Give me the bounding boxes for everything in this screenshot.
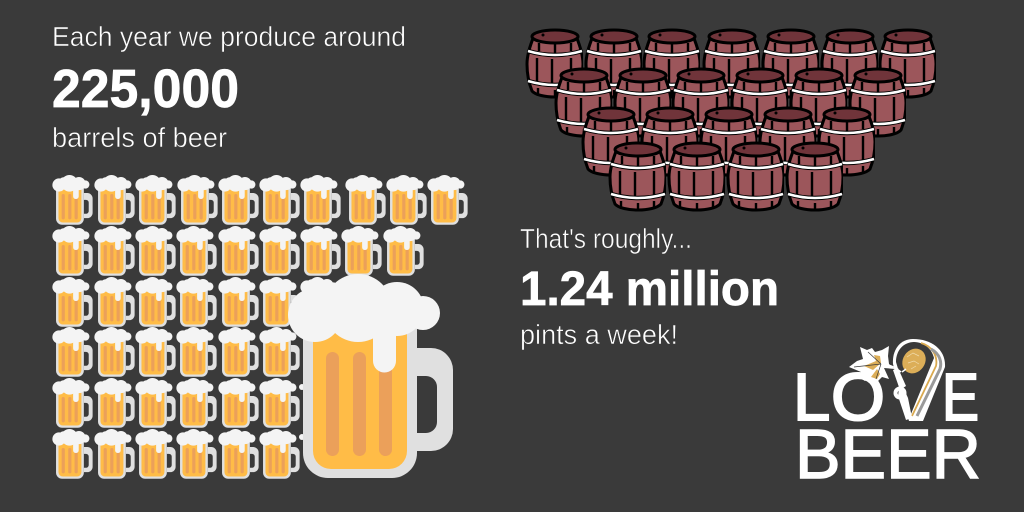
- heading: annual production: 225,000: [52, 59, 239, 119]
- logo: stylised V with hop: [849, 339, 945, 421]
- callout: pints a week: 1.24 million: [520, 263, 779, 316]
- callout: pints a week: pints a week!: [520, 319, 678, 350]
- logo: Love Beer: O: [831, 360, 885, 435]
- logo: Love Beer: [793, 339, 981, 493]
- heading: annual production: Each year we produce around: [52, 21, 406, 52]
- logo: Love Beer: E: [942, 360, 979, 435]
- icon: large beer mug: [288, 274, 453, 478]
- heading: annual production: [52, 21, 406, 153]
- callout: pints a week: That's roughly...: [520, 223, 692, 254]
- icon group: beer barrels: [527, 30, 936, 210]
- logo: Love Beer: BEER: [795, 415, 981, 493]
- callout: pints a week: [520, 223, 779, 350]
- icon grid: small beer mugs: [52, 175, 468, 479]
- logo: Love Beer: L: [793, 360, 830, 435]
- heading: annual production: barrels of beer: [52, 122, 227, 153]
